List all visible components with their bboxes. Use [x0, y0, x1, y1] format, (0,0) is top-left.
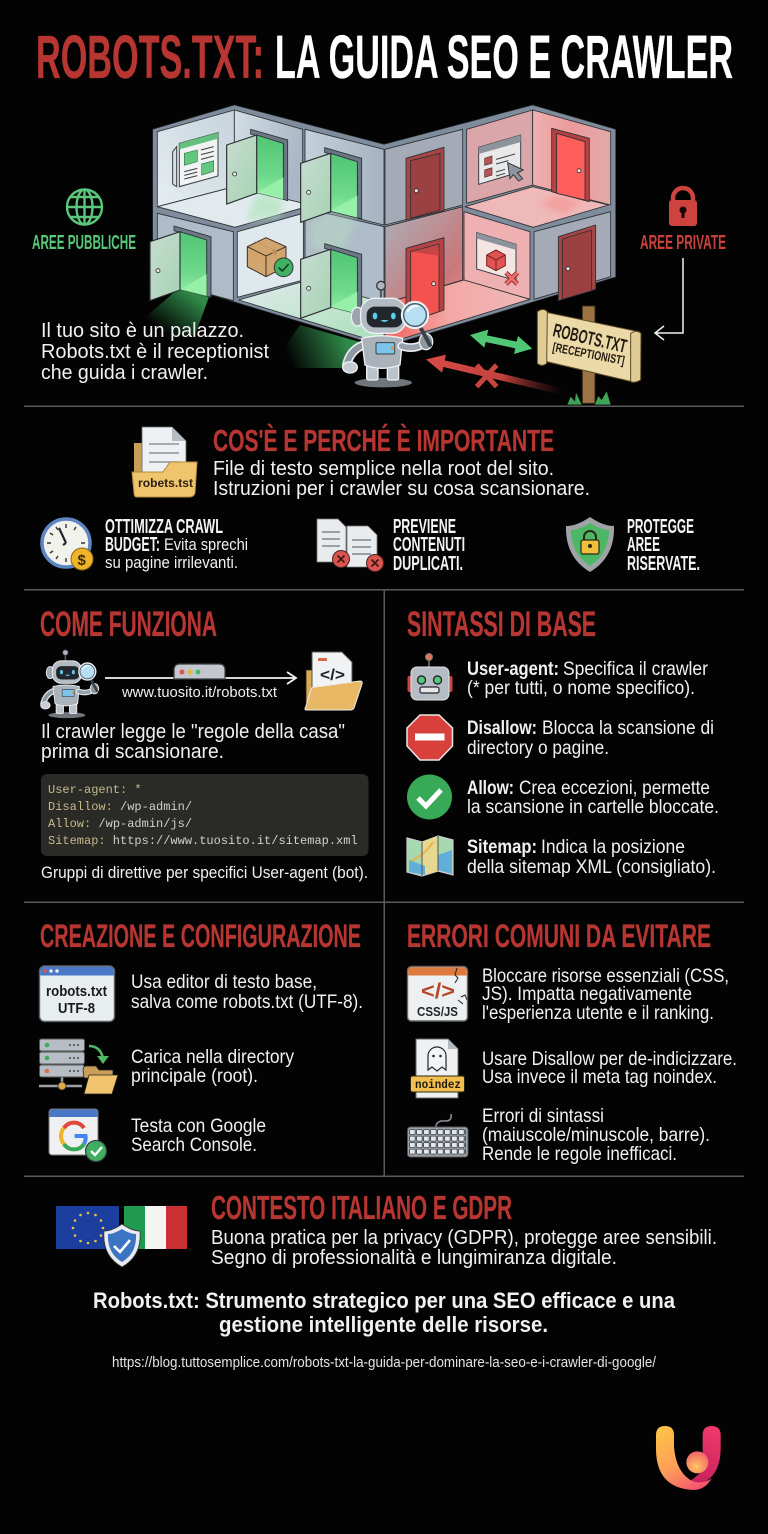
title: ROBOTS.TXT: [36, 23, 264, 92]
text: disallow: directory o pagine. [467, 737, 609, 759]
robot receptionist [343, 281, 433, 387]
panel: come funziona [40, 605, 368, 882]
arrows: allowed and blocked paths [426, 330, 564, 395]
icon: robots.txt folder [132, 427, 197, 497]
text: CONTENUTI [393, 533, 465, 556]
intro text: Il tuo sito è un palazzo. [41, 319, 244, 342]
note: Gruppi di direttive per specifici User-agent (bot). [41, 863, 368, 882]
text: editor [131, 971, 363, 1013]
icon: keyboard [408, 1114, 468, 1157]
icon: check mark [407, 774, 452, 820]
text: syntax errors: Errori di sintassi [482, 1105, 604, 1127]
text: upload: Carica nella directory [131, 1046, 294, 1068]
code block: Sitemap: https://www.tuosito.it/sitemap.xml [48, 834, 358, 848]
text: syntax errors [482, 1105, 710, 1165]
title [36, 23, 733, 92]
icon: clock with coin: $ [78, 552, 86, 569]
door: green open lower middle [301, 244, 362, 318]
text: allow: Crea eccezioni, permette [519, 777, 710, 799]
icon: robots.txt folder: robets.tst [138, 478, 193, 490]
code block: User-agent: * [48, 783, 142, 797]
description: Il crawler legge le "regole della casa" [41, 720, 345, 743]
divider [24, 406, 744, 407]
text: user-agent: User-agent: [467, 658, 559, 680]
text: DUPLICATI. [393, 552, 463, 575]
icon: stop sign [407, 715, 452, 760]
sign text [551, 320, 629, 368]
icon: google search console [49, 1109, 106, 1162]
logo [656, 1426, 721, 1490]
icon: window with cursor [479, 135, 523, 184]
icon: privacy shield [104, 1224, 140, 1267]
sign text: [RECEPTIONIST] [551, 340, 626, 368]
text: disallow misuse [482, 1048, 737, 1088]
body text: Buona pratica per la privacy (GDPR), protegge aree sensibili. [211, 1226, 717, 1249]
text: disallow [467, 717, 714, 759]
feature: protects reserved areas [566, 515, 700, 575]
conclusion [93, 1288, 676, 1337]
icon: utf-8 editor window: UTF-8 [58, 1001, 95, 1017]
text: Evita sprechi [164, 536, 248, 554]
heading: CREAZIONE E CONFIGURAZIONE [40, 918, 361, 954]
body text [211, 1226, 717, 1269]
intro text [41, 319, 269, 384]
code block: Disallow: /wp-admin/ [48, 800, 192, 814]
icon: window with blocked cube [477, 233, 517, 284]
text: RISERVATE. [627, 552, 700, 575]
panel: sintassi di base [407, 605, 719, 878]
text: disallow: Disallow: [467, 717, 537, 739]
text: disallow misuse: Usare Disallow per de-indicizzare. [482, 1048, 737, 1070]
icon: duplicate documents [317, 519, 384, 572]
door: bright red lower [406, 238, 444, 323]
feature: crawl budget [42, 515, 248, 572]
icon: robot head [408, 654, 452, 700]
door: bright red upper [552, 128, 589, 202]
text: sitemap: Sitemap: [467, 836, 537, 858]
panel: errori comuni da evitare [407, 918, 737, 1165]
text: test: Search Console. [131, 1134, 257, 1156]
text: PROTEGGE [627, 515, 694, 538]
text: user-agent: Specifica il crawler [563, 658, 708, 680]
icon: broken css/js window [408, 966, 468, 1021]
text: BUDGET: [105, 533, 160, 556]
icon: server and folder [39, 1039, 118, 1094]
text: disallow misuse: Usa invece il meta tag noindex. [482, 1066, 717, 1088]
wooden sign [537, 306, 641, 405]
green light beams [125, 288, 360, 368]
text: syntax errors: (maiuscole/minuscole, barre). [482, 1124, 710, 1146]
text: editor: salva come robots.txt (UTF-8). [131, 991, 363, 1013]
text [393, 515, 465, 575]
text: disallow: Blocca la scansione di [542, 717, 714, 739]
text: PREVIENE [393, 515, 456, 538]
door: green open upper middle [301, 148, 362, 222]
icon: cardboard box [247, 238, 293, 277]
intro text: Robots.txt è il receptionist [41, 340, 269, 363]
code block [41, 774, 368, 856]
illustration: building cross-section [150, 105, 616, 347]
icon: broken css/js window: </> [421, 980, 455, 1003]
arrow: request [105, 672, 296, 684]
icon: crawler robot [41, 650, 99, 718]
feature: duplicate content [317, 515, 465, 575]
text: allow [467, 777, 719, 818]
text: user-agent: (* per tutti, o nome specifico). [467, 677, 695, 699]
heading: CONTESTO ITALIANO E GDPR [211, 1189, 512, 1226]
label: aree pubbliche: AREE PUBBLICHE [32, 232, 136, 254]
text: blocked resources [482, 965, 729, 1024]
text: upload [131, 1046, 294, 1087]
text: blocked resources: l'esperienza utente e il ranking. [482, 1002, 714, 1024]
text: sitemap [467, 836, 716, 878]
icon: code folder: </> [320, 667, 345, 684]
icon: noindex ghost document: noindez [415, 1078, 461, 1092]
text: allow: la scansione in cartelle bloccate. [467, 796, 719, 818]
text: editor: Usa editor di testo base, [131, 971, 317, 993]
source url: https://blog.tuttosemplice.com/robots-txt-la-guida-per-dominare-la-seo-e-i-crawler-di-google/ [112, 1354, 657, 1371]
icon: utf-8 editor window [40, 966, 114, 1022]
icon: italian flag [124, 1206, 187, 1249]
heading: COS'È E PERCHÉ È IMPORTANTE [213, 423, 554, 458]
dividers [24, 589, 744, 1177]
text [627, 515, 700, 575]
body text [213, 457, 590, 500]
icon: clock with coin [42, 519, 93, 570]
text: AREE [627, 533, 660, 556]
body text: File di testo semplice nella root del sito. [213, 457, 554, 480]
text: user-agent [467, 658, 708, 699]
icon: newspaper [173, 133, 218, 187]
panel: creazione e configurazione [39, 918, 363, 1162]
section: what it is [132, 423, 590, 500]
text [105, 515, 248, 572]
text: test: Testa con Google [131, 1115, 266, 1137]
icon: shield with padlock [566, 517, 614, 572]
section: contesto italiano e gdpr [56, 1189, 717, 1269]
icon: code folder [305, 652, 362, 710]
conclusion: gestione intelligente delle risorse. [219, 1312, 548, 1337]
arrow: private areas to sign [655, 258, 683, 340]
door: green open upper left [227, 129, 288, 204]
text: upload: principale (root). [131, 1065, 258, 1087]
icon: broken css/js window: CSS/JS [417, 1005, 458, 1019]
text: sitemap: Indica la posizione [541, 836, 685, 858]
text: su pagine irrilevanti. [105, 554, 238, 572]
heading: SINTASSI DI BASE [407, 605, 596, 644]
icon: eu flag [56, 1206, 119, 1249]
text: blocked resources: Bloccare risorse essenziali (CSS, [482, 965, 729, 987]
text: sitemap: della sitemap XML (consigliato). [467, 856, 716, 878]
heading: COME FUNZIONA [40, 605, 217, 644]
icon: browser tab [174, 664, 225, 679]
door: closed red upper [406, 147, 444, 220]
text: allow: Allow: [467, 777, 514, 799]
icon: padlock, private areas [669, 188, 697, 226]
code block: Allow: /wp-admin/js/ [48, 817, 192, 831]
body text: Segno di professionalità e lungimiranza digitale. [211, 1246, 617, 1269]
text: syntax errors: Rende le regole inefficaci. [482, 1143, 677, 1165]
text: blocked resources: JS). Impatta negativamente [482, 983, 692, 1005]
intro text: che guida i crawler. [41, 361, 208, 384]
icon: map [407, 836, 453, 876]
icon: globe, public areas [67, 190, 102, 224]
door: green open lower left [150, 226, 211, 301]
text: OTTIMIZZA CRAWL [105, 515, 223, 538]
description [41, 720, 345, 763]
body text: Istruzioni per i crawler su cosa scansionare. [213, 477, 590, 500]
text: test [131, 1115, 266, 1156]
sign text: ROBOTS.TXT [551, 320, 629, 358]
conclusion: Robots.txt: Strumento strategico per una SEO efficace e una [93, 1288, 676, 1313]
icon: noindex ghost document [410, 1039, 464, 1098]
description: prima di scansionare. [41, 740, 224, 763]
icon: utf-8 editor window: robots.txt [46, 984, 107, 1000]
url: www.tuosito.it/robots.txt [121, 684, 278, 701]
door: closed red lower [558, 225, 596, 301]
